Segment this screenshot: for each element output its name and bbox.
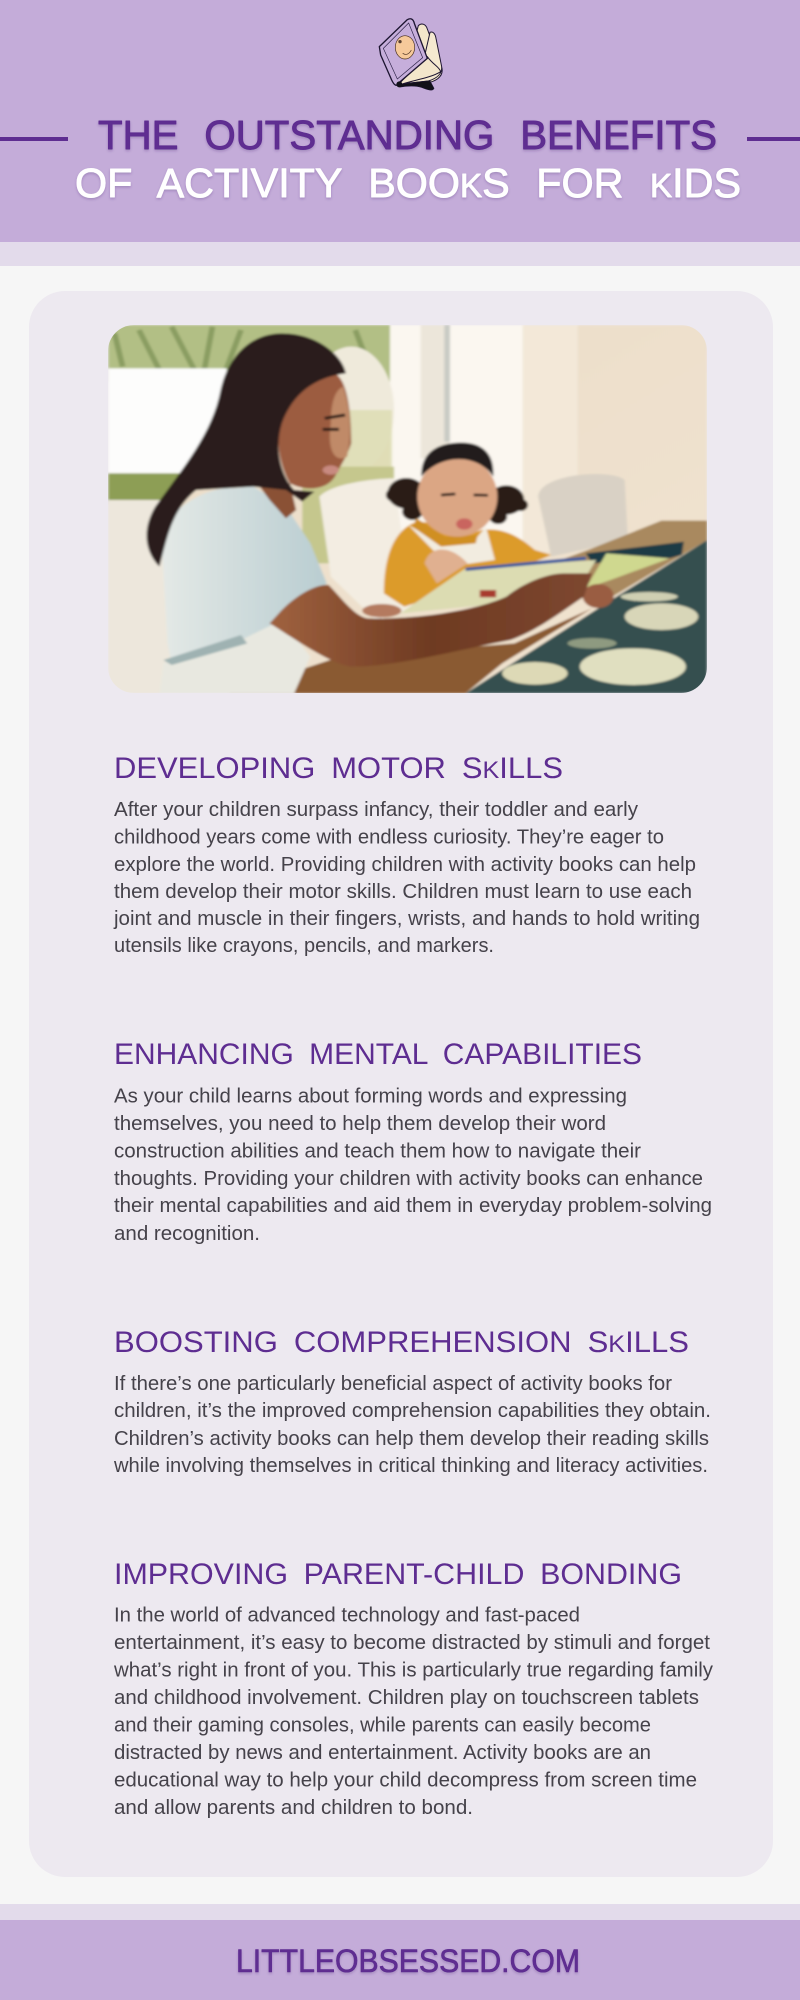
- icon: baby picture book: [379, 19, 442, 90]
- section: developing motor skills: [113, 752, 700, 957]
- section: boosting comprehension skills: [113, 1326, 711, 1477]
- body text: what’s right in front of you. This is particularly true regarding family: [113, 1659, 714, 1682]
- body text: while involving themselves in critical thinking and literacy activities.: [113, 1454, 708, 1477]
- body text: explore the world. Providing children with activity books can help: [114, 853, 696, 876]
- heading: BOOSTING COMPREHENSION S KILLS: [114, 1326, 689, 1359]
- body text: [114, 1085, 712, 1245]
- body text: entertainment, it’s easy to become distracted by stimuli and forget: [114, 1631, 710, 1654]
- heading: DEVELOPING MOTOR S KILLS: [114, 752, 563, 785]
- photo: mother reading with child: [108, 325, 707, 693]
- panel: content: [29, 291, 773, 1877]
- heading: ENHANCING MENTAL CAPABILITIES: [114, 1038, 642, 1071]
- body text: If there’s one particularly beneficial aspect of activity books for: [114, 1372, 672, 1395]
- body text: educational way to help your child decompress from screen time: [114, 1769, 697, 1792]
- title: THE OUTSTANDING BENEFITS: [98, 112, 717, 158]
- body text: their mental capabilities and aid them in everyday problem-solving: [114, 1194, 712, 1217]
- section: enhancing mental capabilities: [114, 1038, 712, 1245]
- body text: thoughts. Providing your children with activity books can enhance: [114, 1167, 703, 1190]
- section: improving parent-child bonding: [113, 1558, 714, 1819]
- body text: and recognition.: [114, 1222, 260, 1245]
- header band: [0, 0, 800, 266]
- body text: and allow parents and children to bond.: [114, 1796, 473, 1819]
- title: [75, 112, 741, 206]
- body text: utensils like crayons, pencils, and markers.: [114, 934, 494, 957]
- body text: joint and muscle in their fingers, wrists, and hands to hold writing: [113, 907, 700, 930]
- body text: [113, 1604, 714, 1819]
- body text: After your children surpass infancy, their toddler and early: [114, 798, 639, 821]
- footer band: [0, 1904, 800, 2000]
- body text: Children’s activity books can help them develop their reading skills: [114, 1427, 709, 1450]
- body text: construction abilities and teach them how to navigate their: [114, 1140, 641, 1163]
- body text: children, it’s the improved comprehension capabilities they obtain.: [114, 1399, 711, 1422]
- heading: IMPROVING PARENT-CHILD BONDING: [114, 1558, 682, 1591]
- body text: As your child learns about forming words and expressing: [114, 1085, 627, 1108]
- body text: and their gaming consoles, while parents can easily become: [114, 1714, 651, 1737]
- body text: and childhood involvement. Children play on touchscreen tablets: [114, 1686, 699, 1709]
- body text: them develop their motor skills. Children must learn to use each: [114, 880, 692, 903]
- footer url: LITTLEOBSESSED.COM: [236, 1943, 580, 1979]
- body text: [113, 798, 700, 957]
- title rule right: [747, 137, 800, 141]
- body text: themselves, you need to help them develop their word: [114, 1112, 606, 1135]
- body text: distracted by news and entertainment. Activity books are an: [114, 1741, 651, 1764]
- title: OF ACTIVITY BOOKS FOR KIDS: [75, 160, 741, 206]
- body text: [113, 1372, 711, 1477]
- title rule left: [0, 137, 68, 141]
- body text: In the world of advanced technology and fast-paced: [114, 1604, 580, 1627]
- body text: childhood years come with endless curiosity. They’re eager to: [114, 826, 664, 848]
